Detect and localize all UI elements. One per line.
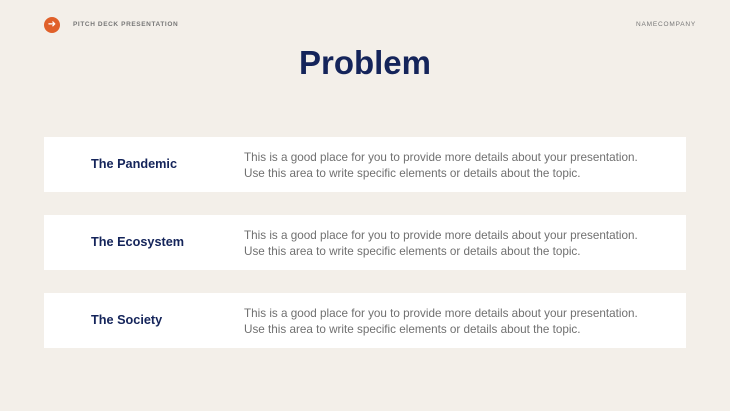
card: society xyxy=(44,293,686,348)
card: ecosystem: The Ecosystem xyxy=(91,235,184,249)
card: society: This is a good place for you to provide more details about your presentation. xyxy=(244,307,638,320)
card: pandemic: The Pandemic xyxy=(91,157,177,171)
icon: orange arrow circle: ➜ xyxy=(48,19,56,30)
card: society: Use this area to write specific elements or details about the topic. xyxy=(244,322,581,336)
card: society: The Society xyxy=(91,313,162,327)
card: ecosystem: This is a good place for you to provide more details about your presentation. xyxy=(244,229,638,242)
header label: PITCH DECK PRESENTATION xyxy=(73,21,178,28)
card: pandemic: This is a good place for you to provide more details about your presentation. xyxy=(244,151,638,164)
card: ecosystem: Use this area to write specific elements or details about the topic. xyxy=(244,244,581,258)
company name: NAMECOMPANY xyxy=(636,21,696,28)
card: ecosystem xyxy=(44,215,686,270)
title: Problem xyxy=(299,44,431,81)
icon: orange arrow circle xyxy=(44,17,60,33)
card: pandemic: Use this area to write specific elements or details about the topic. xyxy=(244,166,581,180)
card: pandemic xyxy=(44,137,686,192)
